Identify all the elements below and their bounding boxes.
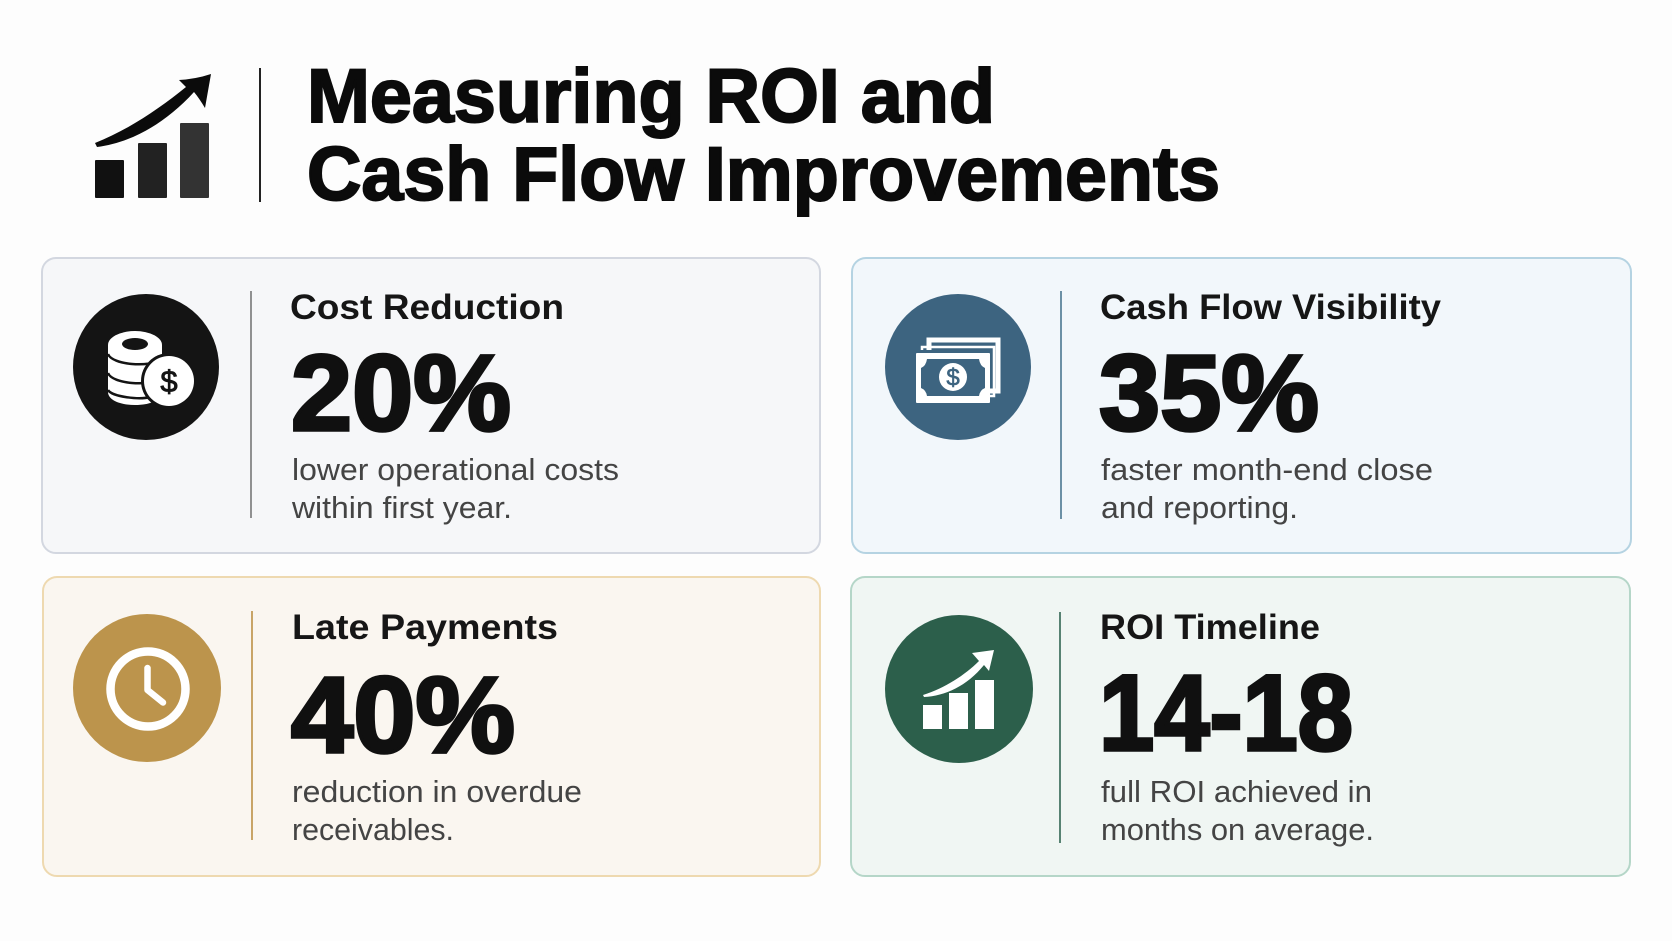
heading: Late Payments	[292, 607, 558, 647]
stat: 20%: 20%	[291, 332, 511, 453]
stat: 40%: 40%	[291, 654, 515, 775]
heading: Cost Reduction	[290, 287, 564, 327]
description	[1101, 774, 1374, 847]
description	[292, 774, 582, 847]
icon: clock	[73, 614, 221, 762]
heading: ROI Timeline	[1100, 607, 1320, 647]
icon: banknotes	[885, 294, 1031, 440]
header	[95, 54, 1220, 217]
description: lower operational costs	[292, 452, 619, 487]
description: within first year.	[291, 490, 512, 525]
icon: growth chart	[885, 615, 1033, 763]
stat: 14-18: 14-18	[1099, 652, 1353, 773]
icon: coin stack: $	[160, 364, 178, 399]
description: receivables.	[292, 812, 454, 847]
title: Measuring ROI and	[307, 54, 995, 139]
icon: growth chart with arrow	[95, 74, 211, 198]
stat: 35%: 35%	[1099, 332, 1319, 453]
title: Cash Flow Improvements	[307, 132, 1220, 217]
description: months on average.	[1101, 812, 1374, 847]
description: full ROI achieved in	[1101, 774, 1372, 809]
panel: late payments	[43, 577, 820, 876]
panel: cost reduction	[42, 258, 820, 553]
panel: cash flow visibility	[852, 258, 1631, 553]
description: and reporting.	[1101, 490, 1298, 525]
description	[1101, 452, 1433, 525]
heading: Cash Flow Visibility	[1100, 287, 1441, 327]
icon: banknotes: $	[946, 364, 960, 392]
description: faster month-end close	[1101, 452, 1433, 487]
panel: ROI timeline	[851, 577, 1630, 876]
icon: coin stack	[73, 294, 219, 440]
description	[291, 452, 619, 525]
title	[307, 54, 1220, 217]
description: reduction in overdue	[292, 774, 582, 809]
